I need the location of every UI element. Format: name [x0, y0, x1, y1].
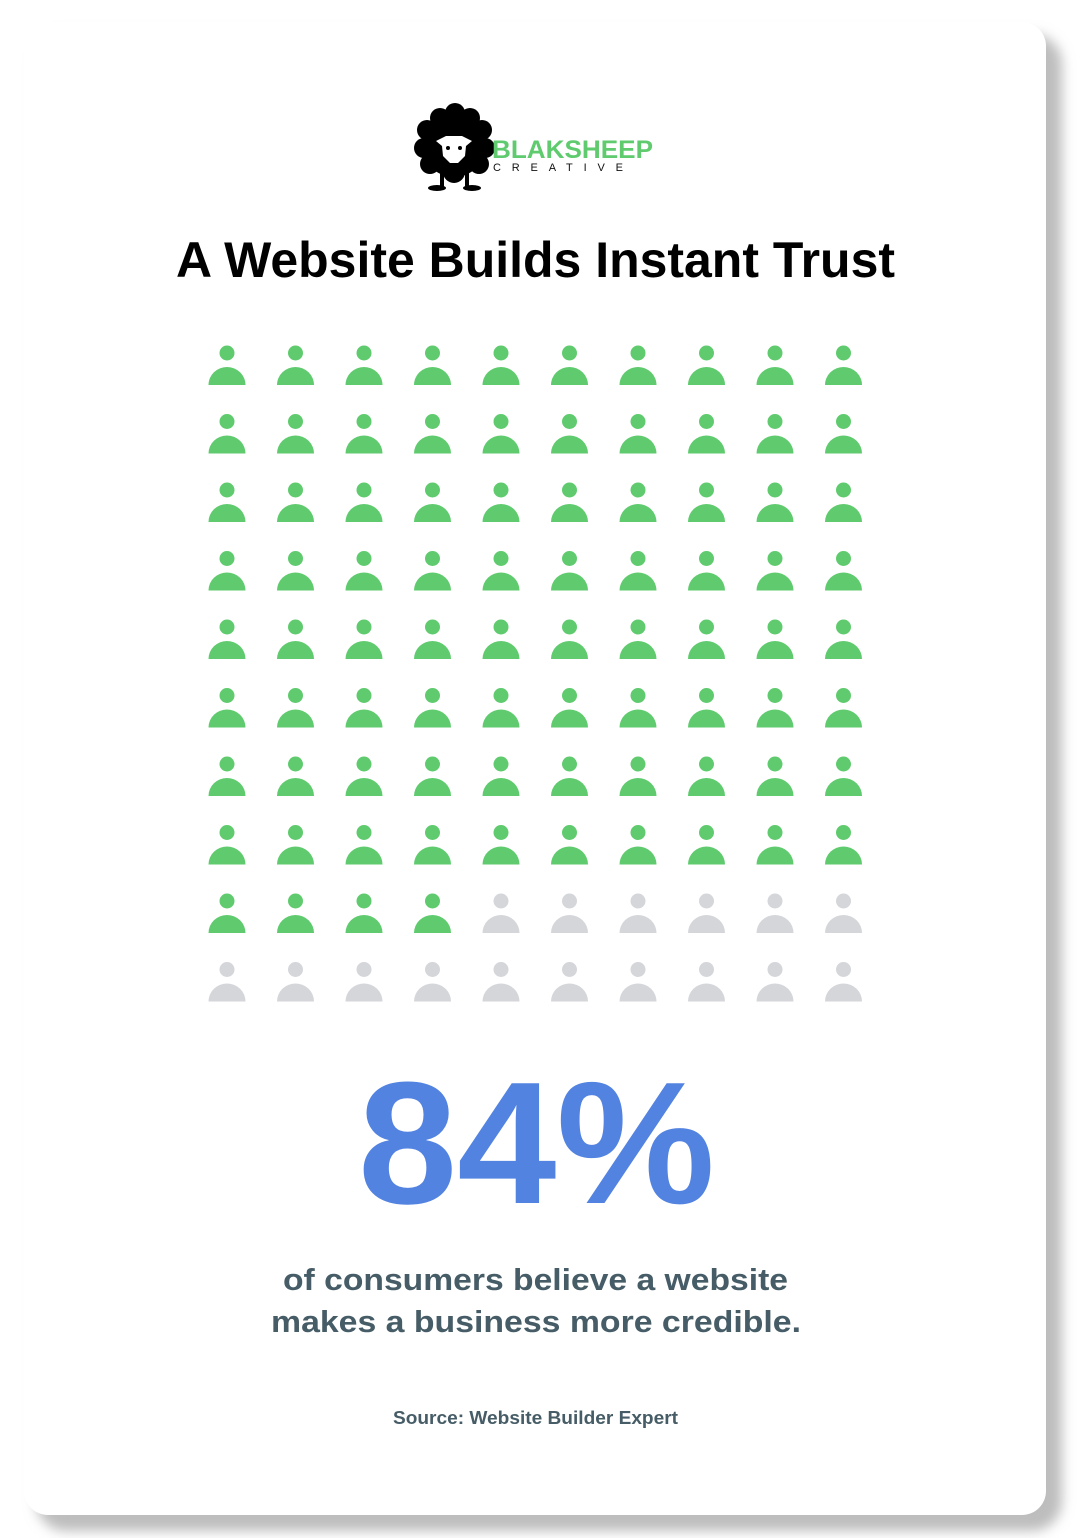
logo — [414, 103, 653, 191]
row 9 — [208, 894, 862, 933]
icon grid: 84 of 100 people — [208, 346, 862, 1002]
description: makes a business more credible. — [271, 1304, 801, 1339]
row 1 — [208, 346, 862, 385]
big stat: 84% — [358, 1045, 715, 1240]
logo text: BLAKSHEEP — [492, 136, 653, 164]
source: Source: Website Builder Expert — [393, 1408, 678, 1428]
description: of consumers believe a website — [283, 1262, 788, 1297]
row 5 — [208, 620, 862, 659]
row 10 — [208, 962, 862, 1002]
row 3 — [208, 482, 862, 522]
row 2 — [208, 414, 862, 454]
description — [271, 1262, 801, 1339]
row 6 — [208, 688, 862, 728]
logo: CREATIVE — [493, 162, 623, 174]
row 7 — [208, 756, 862, 796]
row 8 — [208, 825, 862, 864]
title: A Website Builds Instant Trust — [176, 232, 895, 288]
icon: sheep — [414, 103, 495, 191]
row 4 — [208, 551, 862, 590]
